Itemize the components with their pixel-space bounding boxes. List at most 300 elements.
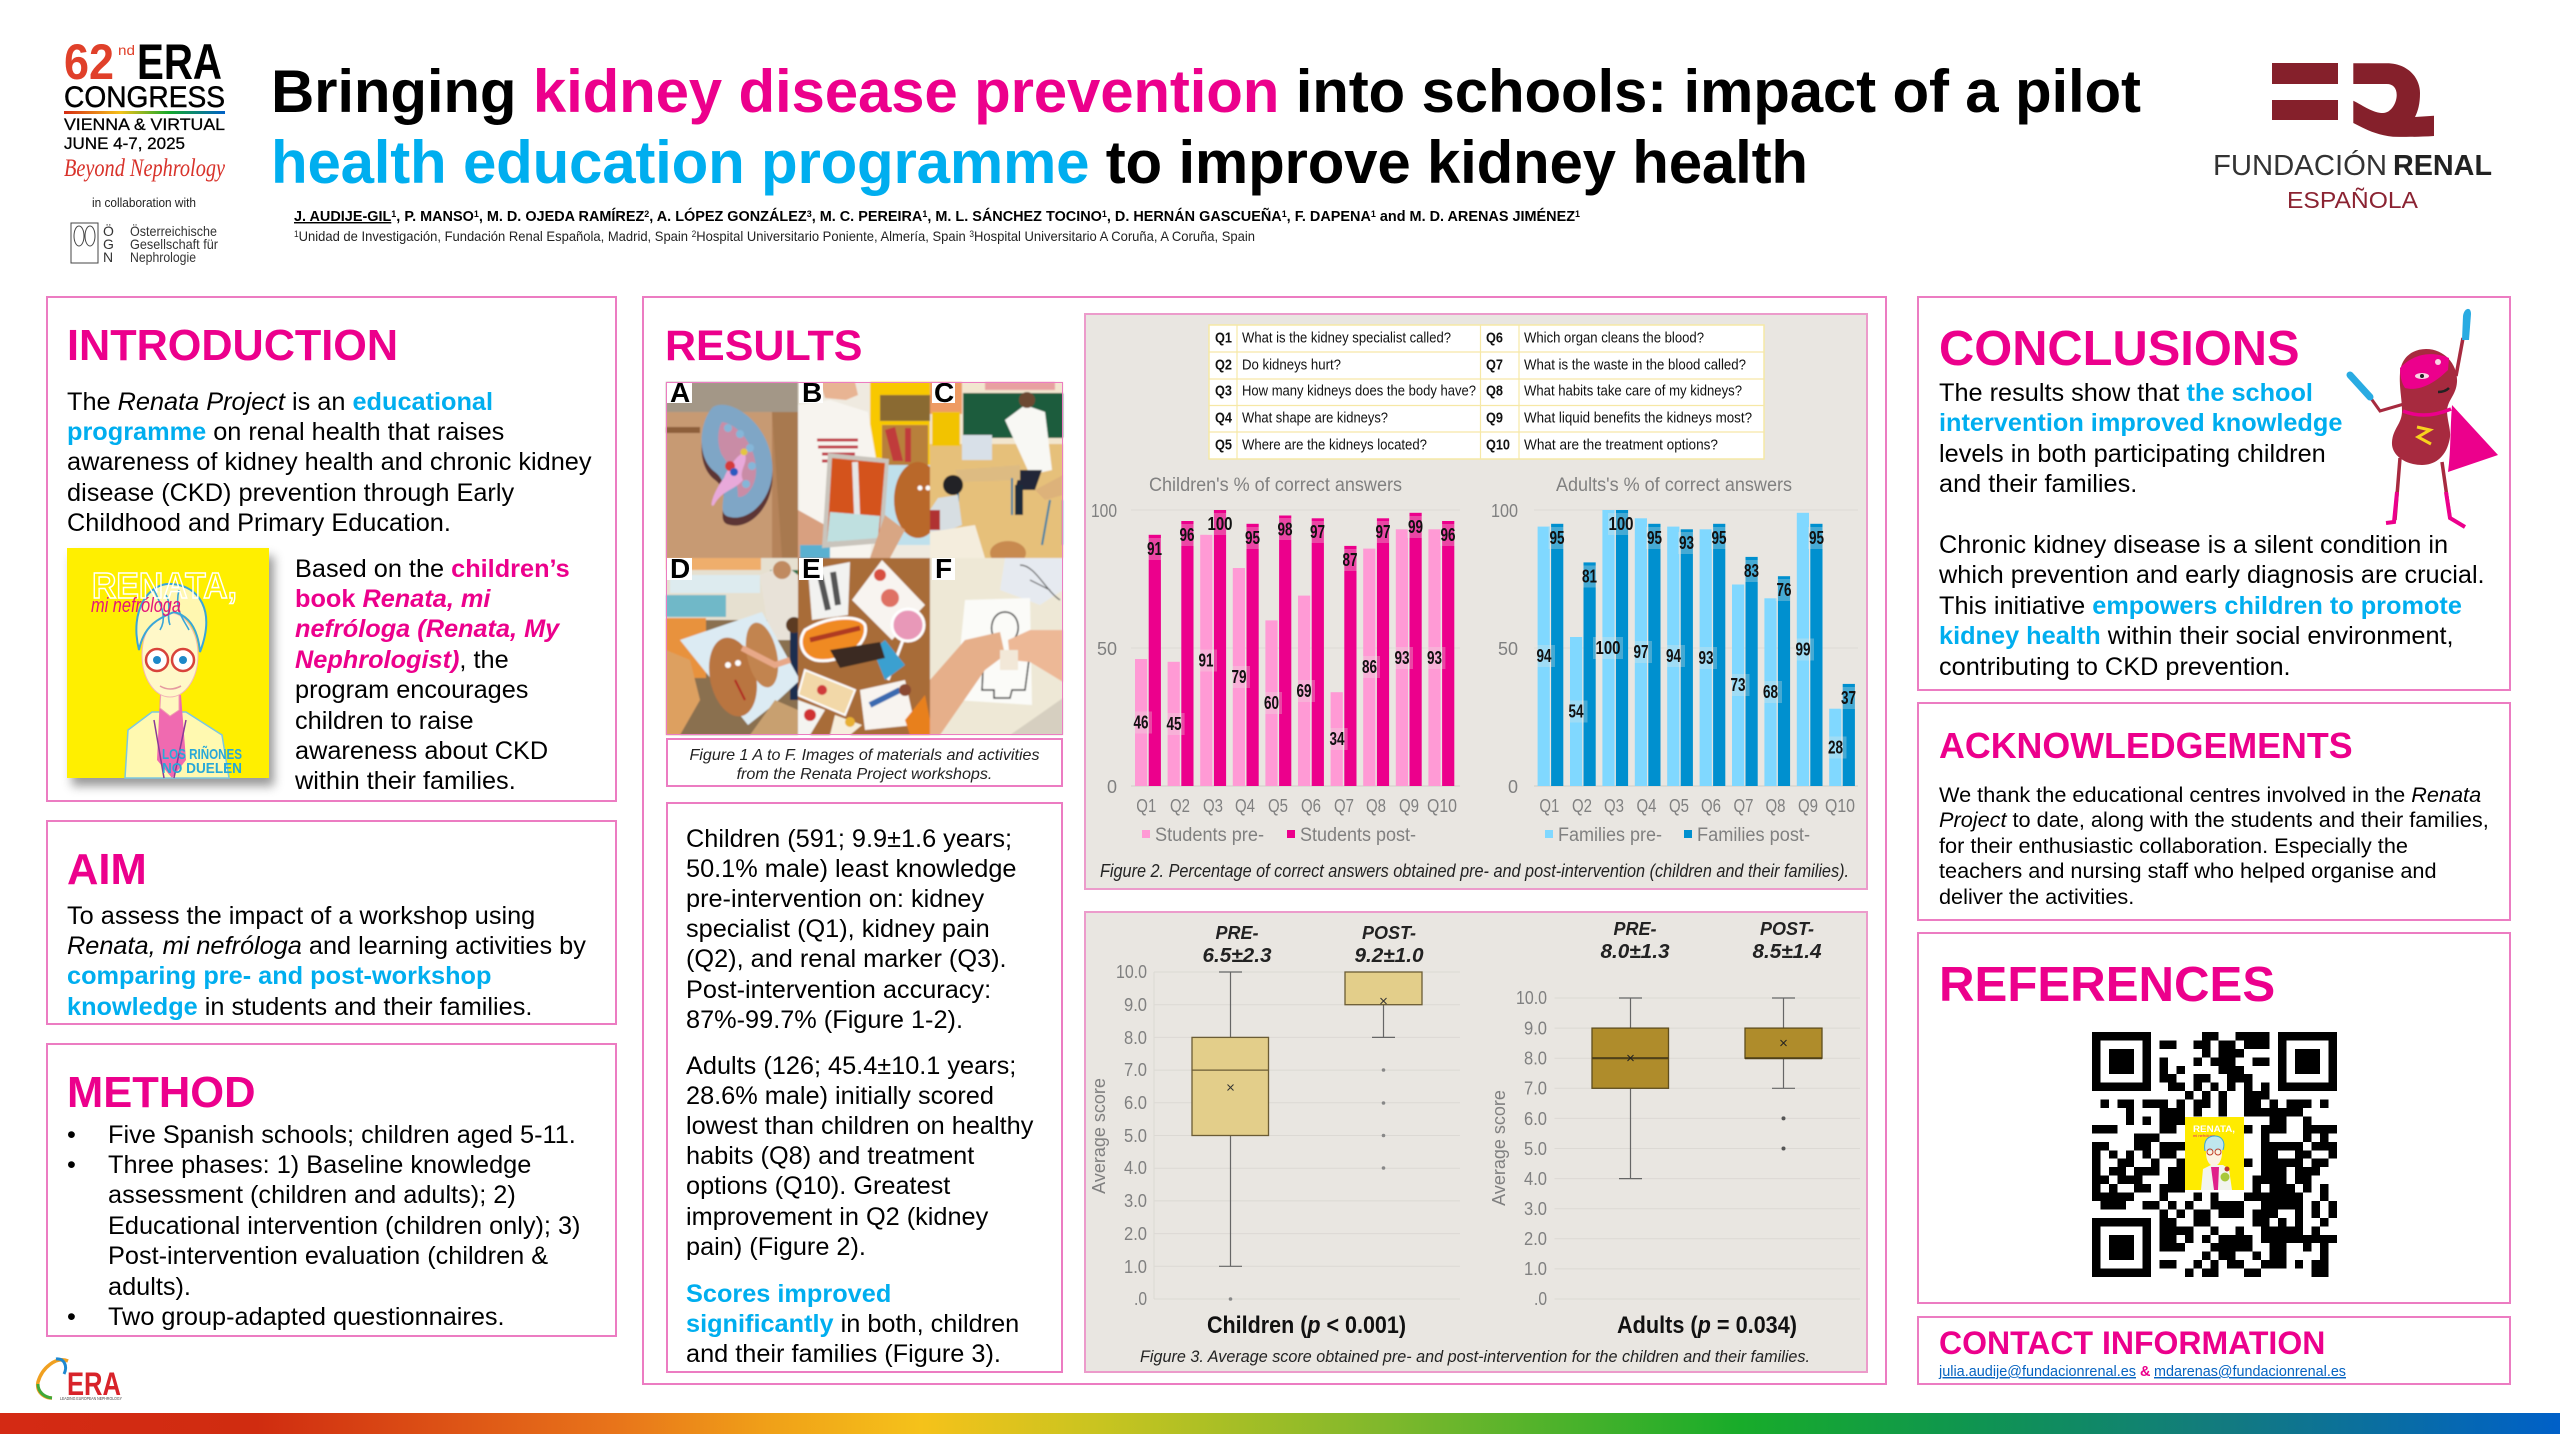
bar chart: children's correct answers: 93 xyxy=(1394,648,1410,668)
bar chart: adults' correct answers: 83 xyxy=(1744,561,1759,581)
logo: Fundación Renal Española: FUNDACIÓN xyxy=(2213,149,2387,182)
text: aim: Renata, mi nefróloga and learning activities by xyxy=(67,932,586,960)
authors and affiliations: 1 xyxy=(1102,209,1107,219)
QR centre: mini book cover: mi nefróloga xyxy=(2193,1133,2216,1138)
photo A: kidney model xyxy=(666,382,798,558)
authors and affiliations: 1 xyxy=(1575,209,1580,219)
text: children results: pre-intervention on: kidney xyxy=(686,885,984,913)
text: acknowledgements xyxy=(1939,782,2489,909)
panel letters A to F: E xyxy=(802,553,821,584)
logo: 62nd ERA Congress: CONGRESS xyxy=(64,81,225,114)
heading: conclusions: CONCLUSIONS xyxy=(1939,322,2300,376)
bar chart: adults' correct answers: Q1 xyxy=(1539,796,1559,816)
text: contact emails: julia.audije@fundacionrenal.es xyxy=(1938,1364,2136,1380)
text: conclusions: and their families. xyxy=(1939,470,2137,498)
photo E: cut-out cards xyxy=(798,558,930,735)
caption: figure 2: Figure 2. Percentage of correct answers obtained pre- and post-intervention (children and their families). xyxy=(1100,861,1849,881)
bar chart: adults' correct answers: 81 xyxy=(1582,566,1597,586)
text: introduction: programme on renal health that raises xyxy=(67,418,504,446)
text: children results: 87%-99.7% (Figure 1-2). xyxy=(686,1006,963,1034)
bar chart: children's correct answers: Q8 xyxy=(1366,796,1386,816)
panel letters A to F: B xyxy=(802,377,822,408)
text: book description: Based on the children’s xyxy=(295,554,570,582)
panel: acknowledgements xyxy=(1917,702,2511,921)
box plot: adults: Average score xyxy=(1489,1090,1509,1206)
bar chart: adults' correct answers: Q2 xyxy=(1572,796,1592,816)
text: book description: children to raise xyxy=(295,707,474,735)
logo: 62nd ERA Congress: Nephrologie xyxy=(130,249,196,265)
authors and affiliations: Unidad de Investigación, Fundación Renal Española, Madrid, Spain xyxy=(299,228,692,244)
heading: results: RESULTS xyxy=(665,322,862,370)
bar chart: children's correct answers: Q4 xyxy=(1235,796,1255,816)
text: aim: To assess the impact of a workshop using xyxy=(67,902,535,930)
text: conclusions: This initiative empowers children to promote xyxy=(1939,592,2462,620)
bar chart: adults' correct answers: Q9 xyxy=(1798,796,1818,816)
logo: ERA: ERA xyxy=(67,1366,121,1402)
bar chart: children's correct answers xyxy=(1091,475,1460,846)
title xyxy=(271,58,2141,196)
authors and affiliations: 1 xyxy=(1282,209,1287,219)
bar chart: children's correct answers: Q1 xyxy=(1136,796,1156,816)
text: acknowledgements: for their enthusiastic collaboration. Especially the xyxy=(1939,833,2408,858)
bar chart: children's correct answers: 93 xyxy=(1427,648,1442,668)
bar chart: adults' correct answers: Families post- xyxy=(1697,825,1810,846)
text: contact emails: & xyxy=(2140,1364,2151,1380)
box plot: children: POST- xyxy=(1362,923,1416,943)
text: acknowledgements: We thank the educational centres involved in the Renata xyxy=(1939,782,2481,806)
panel letters A to F: C xyxy=(934,377,954,408)
bar chart: adults' correct answers: 95 xyxy=(1809,528,1824,548)
bar chart: children's correct answers: 79 xyxy=(1232,667,1246,687)
bar chart: children's correct answers: Q9 xyxy=(1399,796,1419,816)
question table: What are the treatment options? xyxy=(1524,436,1718,454)
panel: references xyxy=(1917,932,2511,1304)
bar chart: adults' correct answers: 28 xyxy=(1828,738,1843,758)
photo C: classroom with teacher xyxy=(930,380,1063,565)
bar chart: children's correct answers: 96 xyxy=(1180,525,1194,545)
box plot: adults: 4.0 xyxy=(1524,1169,1547,1189)
box plot: children: 9.2±1.0 xyxy=(1354,945,1424,967)
bar chart: children's correct answers: 96 xyxy=(1440,525,1456,545)
text: contact emails xyxy=(1938,1364,2346,1380)
box plot: children: 2.0 xyxy=(1124,1224,1147,1244)
box plot: adults xyxy=(1489,919,1860,1339)
bar chart: children's correct answers: 69 xyxy=(1296,681,1312,701)
heading: aim: AIM xyxy=(67,846,147,894)
panel: figure 3 xyxy=(1084,911,1868,1373)
authors and affiliations: 1 xyxy=(1371,209,1376,219)
panel letters A to F: A xyxy=(670,377,690,408)
QR code xyxy=(2092,1032,2337,1277)
box plot: adults: 8.0 xyxy=(1524,1048,1547,1068)
bar chart: adults' correct answers: 0 xyxy=(1508,777,1518,797)
text: contact emails: mdarenas@fundacionrenal.es xyxy=(2154,1364,2346,1380)
text: conclusions: intervention improved knowledge xyxy=(1939,409,2342,437)
logo: 62nd ERA Congress: Beyond Nephrology xyxy=(64,155,226,182)
bar chart: adults' correct answers: 73 xyxy=(1730,675,1746,695)
box plot: children: PRE- xyxy=(1215,923,1259,943)
authors and affiliations: 1 xyxy=(474,209,479,219)
authors and affiliations: J. AUDIJE-GIL xyxy=(294,209,391,225)
bar chart: children's correct answers: Q5 xyxy=(1268,796,1288,816)
caption: figure 1: Figure 1 A to F. Images of materials and activities xyxy=(689,746,1040,764)
question table: What liquid benefits the kidneys most? xyxy=(1524,410,1752,426)
text: conclusions xyxy=(1939,379,2485,681)
text: adults results: pain) (Figure 2). xyxy=(686,1233,866,1261)
box plot: adults: .0 xyxy=(1534,1289,1547,1309)
box plot: adults: 6.0 xyxy=(1524,1109,1547,1129)
bar chart: children's correct answers: Q7 xyxy=(1334,796,1354,816)
bar chart: adults' correct answers: Q5 xyxy=(1669,796,1689,816)
text: significance: and their families (Figure 3). xyxy=(686,1340,1001,1368)
authors and affiliations: , M. D. OJEDA RAMÍREZ xyxy=(479,208,644,225)
bar chart: adults' correct answers: Q10 xyxy=(1825,796,1855,816)
authors and affiliations: and M. D. ARENAS JIMÉNEZ xyxy=(1376,208,1575,225)
authors and affiliations: , M. L. SÁNCHEZ TOCINO xyxy=(927,208,1102,225)
bar chart: adults' correct answers: 100 xyxy=(1491,501,1518,521)
bar chart: children's correct answers: 100 xyxy=(1091,501,1117,521)
heading: acknowledgements: ACKNOWLEDGEMENTS xyxy=(1939,726,2353,766)
logo: 62nd ERA Congress: VIENNA & VIRTUAL xyxy=(64,115,225,134)
text: book description: book Renata, mi xyxy=(295,585,490,613)
text: conclusions: The results show that the school xyxy=(1939,379,2313,407)
box plot: adults: 8.0±1.3 xyxy=(1600,941,1670,963)
box plot: children: 7.0 xyxy=(1124,1060,1147,1080)
authors and affiliations: 3 xyxy=(969,229,974,239)
bar chart: children's correct answers: 50 xyxy=(1097,639,1117,659)
title: health education programme to improve kidney health xyxy=(271,129,1808,196)
text: method list xyxy=(67,1120,580,1331)
text: adults results: lowest than children on healthy xyxy=(686,1112,1033,1140)
text: book description: awareness about CKD xyxy=(295,737,548,765)
authors and affiliations: 2 xyxy=(692,229,696,239)
question table: Q7 xyxy=(1486,356,1503,374)
text: adults results: improvement in Q2 (kidney xyxy=(686,1203,988,1231)
box plot: adults: POST- xyxy=(1760,919,1814,939)
box plot: adults: 1.0 xyxy=(1524,1259,1547,1279)
authors and affiliations: , M. C. PEREIRA xyxy=(812,209,923,225)
photo D: kidney board xyxy=(666,558,802,735)
icon: superhero kidney character xyxy=(2346,308,2498,529)
panel letters A to F xyxy=(667,377,955,584)
rainbow footer bar xyxy=(0,1413,2560,1434)
bar chart: adults' correct answers: 100 xyxy=(1608,514,1634,534)
text: introduction: Childhood and Primary Education. xyxy=(67,509,451,537)
text: conclusions: levels in both participating children xyxy=(1939,440,2326,468)
text: book description xyxy=(295,554,570,795)
bar chart: adults' correct answers: 100 xyxy=(1596,638,1620,658)
box plot: adults: 2.0 xyxy=(1524,1229,1547,1249)
logo: 62nd ERA Congress: 62 xyxy=(64,34,114,90)
bar chart: children's correct answers: 46 xyxy=(1134,712,1148,732)
bar chart: children's correct answers: 97 xyxy=(1310,522,1325,542)
bar chart: children's correct answers: 87 xyxy=(1342,550,1358,570)
authors and affiliations: 1 xyxy=(922,209,927,219)
logo: 62nd ERA Congress: G xyxy=(103,236,114,252)
box plot: children: Children (p < 0.001) xyxy=(1207,1312,1406,1339)
text: book description: nefróloga (Renata, My xyxy=(295,615,559,643)
bar chart: adults' correct answers: 95 xyxy=(1550,528,1564,548)
authors and affiliations: 2 xyxy=(644,209,649,219)
heading: introduction: INTRODUCTION xyxy=(67,322,398,370)
bar chart: adults' correct answers: 76 xyxy=(1776,580,1792,600)
logo: 62nd ERA Congress: in collaboration with xyxy=(92,196,196,210)
text: introduction xyxy=(67,388,592,537)
text: adults results: habits (Q8) and treatment xyxy=(686,1142,974,1170)
question table: How many kidneys does the body have? xyxy=(1242,382,1476,400)
text: aim xyxy=(67,902,586,1021)
box plot: children: 3.0 xyxy=(1124,1191,1147,1211)
panel: aim xyxy=(46,820,617,1025)
bar chart: adults' correct answers: 37 xyxy=(1841,688,1856,708)
figure 1: workshop photographs A to F xyxy=(664,377,1064,736)
box plot: adults: 7.0 xyxy=(1524,1078,1547,1098)
question table: Q6 xyxy=(1486,330,1503,346)
text: method list: • xyxy=(67,1303,76,1331)
text: method list: Educational intervention (children only); 3) xyxy=(108,1212,580,1240)
box plot: adults: 10.0 xyxy=(1516,988,1547,1008)
question table: Q10 xyxy=(1486,436,1510,454)
text: conclusions: kidney health within their social environment, xyxy=(1939,622,2454,650)
question table: What is the waste in the blood called? xyxy=(1524,356,1746,374)
text: introduction: disease (CKD) prevention through Early xyxy=(67,479,514,507)
panel: results text xyxy=(666,802,1063,1373)
logo: 62nd ERA Congress: ERA xyxy=(137,34,222,90)
box plot: adults: 3.0 xyxy=(1524,1199,1547,1219)
text: children results: 50.1% male) least knowledge xyxy=(686,855,1016,883)
box plot: adults: 5.0 xyxy=(1524,1139,1547,1159)
logo: Fundación Renal Española: RENAL xyxy=(2393,150,2492,182)
box plot: adults: 8.5±1.4 xyxy=(1752,941,1822,963)
text: significance: significantly in both, children xyxy=(686,1310,1019,1338)
authors and affiliations: Hospital Universitario Poniente, Almería, Spain xyxy=(696,228,969,244)
text: method list: Two group-adapted questionnaires. xyxy=(108,1303,505,1331)
panel: contact information xyxy=(1917,1316,2511,1385)
logo: ERA: LEADING EUROPEAN NEPHROLOGY xyxy=(60,1396,122,1401)
panel: conclusions xyxy=(1917,296,2511,691)
bar chart: children's correct answers: Q10 xyxy=(1427,796,1457,816)
bar chart: children's correct answers: 97 xyxy=(1376,522,1390,542)
question table: Do kidneys hurt? xyxy=(1242,356,1341,374)
QR centre: mini book cover xyxy=(2185,1117,2244,1190)
text: acknowledgements: Project to date, along with the students and their families, xyxy=(1939,807,2489,832)
bar chart: adults' correct answers: 95 xyxy=(1647,528,1662,548)
caption: figure 1: from the Renata Project workshops. xyxy=(737,765,992,783)
logo: 62nd ERA Congress: nd xyxy=(118,42,135,58)
bar chart: adults' correct answers xyxy=(1491,475,1858,846)
authors and affiliations: , P. MANSO xyxy=(396,209,474,225)
caption: figure 1 xyxy=(666,738,1063,787)
bar chart: children's correct answers: Students pre- xyxy=(1155,825,1264,846)
bar chart: children's correct answers: Children's % of correct answers xyxy=(1149,475,1402,496)
bar chart: adults' correct answers: 94 xyxy=(1666,646,1681,666)
text: acknowledgements: teachers and nursing staff who helped organise and xyxy=(1939,858,2437,883)
bar chart: adults' correct answers: Q8 xyxy=(1766,796,1786,816)
bar chart: adults' correct answers: 94 xyxy=(1536,646,1552,666)
text: acknowledgements: deliver the activities. xyxy=(1939,884,2134,909)
box plot: adults: Adults (p = 0.034) xyxy=(1617,1312,1797,1339)
caption: figure 3: Figure 3. Average score obtained pre- and post-intervention for the children and their families. xyxy=(1140,1347,1810,1366)
box plot: children: 9.0 xyxy=(1124,995,1147,1015)
box plot: children: 4.0 xyxy=(1124,1158,1147,1178)
book cover: Renata, mi nefróloga: RENATA, xyxy=(92,565,237,606)
bar chart: children's correct answers: 99 xyxy=(1408,517,1423,537)
question table: Q1 xyxy=(1215,330,1232,346)
authors and affiliations: , F. DAPENA xyxy=(1287,209,1371,225)
text: method list: Five Spanish schools; children aged 5-11. xyxy=(108,1120,576,1148)
authors and affiliations: 1 xyxy=(391,209,396,219)
text: significance xyxy=(686,1280,1019,1368)
box plot: children: 6.5±2.3 xyxy=(1202,945,1272,967)
panel letters A to F: F xyxy=(935,553,952,584)
text: children results: specialist (Q1), kidney pain xyxy=(686,915,990,943)
book cover: Renata, mi nefróloga: NO DUELEN xyxy=(162,760,242,777)
text: aim: knowledge in students and their families. xyxy=(67,993,532,1021)
box plot: children: 8.0 xyxy=(1124,1028,1147,1048)
photo F: hands on body worksheet xyxy=(930,558,1063,735)
text: children results: Children (591; 9.9±1.6 years; xyxy=(686,824,1012,852)
bar chart: children's correct answers: 34 xyxy=(1330,729,1344,749)
text: book description: within their families. xyxy=(295,767,516,795)
text: adults results: Adults (126; 45.4±10.1 years; xyxy=(686,1052,1016,1080)
bar chart: adults' correct answers: 68 xyxy=(1763,682,1778,702)
text: children results xyxy=(686,824,1016,1034)
text: introduction: The Renata Project is an educational xyxy=(67,388,493,416)
bar chart: children's correct answers: Students post- xyxy=(1300,825,1416,846)
box plot: children: .0 xyxy=(1134,1289,1147,1309)
question table: Q4 xyxy=(1215,410,1233,426)
bar chart: adults' correct answers: Families pre- xyxy=(1558,825,1662,846)
text: introduction: awareness of kidney health and chronic kidney xyxy=(67,448,592,476)
question table xyxy=(1209,325,1764,459)
bar chart: adults' correct answers: Q7 xyxy=(1734,796,1754,816)
bar chart: children's correct answers: 98 xyxy=(1278,520,1292,540)
text: method list: • xyxy=(67,1151,76,1179)
bar chart: adults' correct answers: 99 xyxy=(1796,640,1810,660)
authors and affiliations xyxy=(294,207,1580,244)
logo: 62nd ERA Congress: Österreichische xyxy=(130,222,217,239)
authors and affiliations: , A. LÓPEZ GONZÁLEZ xyxy=(649,207,807,225)
heading: method: METHOD xyxy=(67,1068,256,1116)
bar chart: adults' correct answers: 54 xyxy=(1568,702,1584,722)
question table: What habits take care of my kidneys? xyxy=(1524,382,1742,400)
logo: 62nd ERA Congress: N xyxy=(103,249,113,265)
question table: Q3 xyxy=(1215,382,1232,400)
bar chart: children's correct answers: 86 xyxy=(1362,657,1377,677)
question table: Q8 xyxy=(1486,382,1503,400)
QR centre: mini book cover: RENATA, xyxy=(2193,1124,2235,1134)
panel: figure 2 xyxy=(1084,313,1868,890)
text: adults results: options (Q10). Greatest xyxy=(686,1172,950,1200)
book cover: Renata, mi nefróloga: mi nefróloga xyxy=(91,595,181,617)
text: conclusions: Chronic kidney disease is a silent condition in xyxy=(1939,531,2448,559)
book cover: Renata, mi nefróloga xyxy=(66,548,280,792)
logo: ERA xyxy=(36,1357,122,1402)
text: book description: Nephrologist), the xyxy=(295,646,509,674)
box plot: children: 6.0 xyxy=(1124,1093,1147,1113)
text: method list: assessment (children and adults); 2) xyxy=(108,1181,516,1209)
text: adults results xyxy=(686,1052,1034,1261)
authors and affiliations: , D. HERNÁN GASCUEÑA xyxy=(1107,207,1282,225)
question table: What is the kidney specialist called? xyxy=(1242,330,1451,346)
bar chart: children's correct answers: 0 xyxy=(1107,777,1117,797)
title: Bringing kidney disease prevention into schools: impact of a pilot xyxy=(271,58,2141,125)
bar chart: children's correct answers: Q3 xyxy=(1203,796,1223,816)
panel: results xyxy=(642,296,1887,1385)
bar chart: children's correct answers: 91 xyxy=(1147,539,1162,559)
bar chart: adults' correct answers: 93 xyxy=(1698,648,1714,668)
question table: Q5 xyxy=(1215,436,1232,454)
logo: 62nd ERA Congress xyxy=(64,34,226,265)
panel letters A to F: D xyxy=(670,553,690,584)
bar chart: children's correct answers: 95 xyxy=(1245,528,1260,548)
question table: Q2 xyxy=(1215,356,1232,374)
text: method list: Post-intervention evaluation (children & xyxy=(108,1242,548,1270)
text: children results: (Q2), and renal marker (Q3). xyxy=(686,945,1007,973)
question table: Q9 xyxy=(1486,410,1503,426)
panel: method xyxy=(46,1043,617,1337)
logo: 62nd ERA Congress: Gesellschaft für xyxy=(130,236,218,252)
bar chart: adults' correct answers: Adults's % of correct answers xyxy=(1556,475,1792,496)
box plot: children xyxy=(1089,923,1460,1339)
logo: 62nd ERA Congress: JUNE 4-7, 2025 xyxy=(64,134,185,153)
text: method list: adults). xyxy=(108,1273,191,1301)
box plot: children: 1.0 xyxy=(1124,1257,1147,1277)
box plot: children: 10.0 xyxy=(1116,962,1147,982)
bar chart: adults' correct answers: 93 xyxy=(1679,533,1694,553)
text: conclusions: which prevention and early diagnosis are crucial. xyxy=(1939,561,2485,589)
bar chart: children's correct answers: Q6 xyxy=(1301,796,1321,816)
book cover: Renata, mi nefróloga: LOS RIÑONES xyxy=(162,745,242,763)
bar chart: adults' correct answers: Q4 xyxy=(1636,796,1656,816)
text: adults results: 28.6% male) initially scored xyxy=(686,1082,994,1110)
logo: Fundación Renal Española xyxy=(2213,63,2492,213)
bar chart: children's correct answers: 60 xyxy=(1264,693,1279,713)
bar chart: children's correct answers: 45 xyxy=(1166,714,1182,734)
bar chart: adults' correct answers: Q6 xyxy=(1701,796,1721,816)
text: method list: • xyxy=(67,1120,76,1148)
authors and affiliations: Hospital Universitario A Coruña, A Coruña, Spain xyxy=(974,228,1255,244)
text: conclusions: contributing to CKD prevention. xyxy=(1939,653,2291,681)
question table: What shape are kidneys? xyxy=(1242,410,1388,426)
authors and affiliations: 3 xyxy=(807,209,812,219)
bar chart: children's correct answers: 100 xyxy=(1208,514,1232,534)
panel: introduction xyxy=(46,296,617,802)
box plot: adults: 9.0 xyxy=(1524,1018,1547,1038)
bar chart: adults' correct answers: 97 xyxy=(1634,642,1648,662)
box plot: children: Average score xyxy=(1089,1078,1109,1194)
authors and affiliations: 1 xyxy=(294,229,299,239)
heading: references: REFERENCES xyxy=(1939,956,2275,1012)
text: book description: program encourages xyxy=(295,676,528,704)
logo: 62nd ERA Congress: Ö xyxy=(103,222,114,239)
heading: contact information: CONTACT INFORMATION xyxy=(1939,1325,2325,1361)
text: children results: Post-intervention accuracy: xyxy=(686,976,991,1004)
bar chart: adults' correct answers: 95 xyxy=(1712,528,1726,548)
box plot: children: 5.0 xyxy=(1124,1126,1147,1146)
photo B: tablet with kidneys xyxy=(798,382,942,558)
bar chart: adults' correct answers: 50 xyxy=(1498,639,1518,659)
text: aim: comparing pre- and post-workshop xyxy=(67,962,491,990)
question table: Where are the kidneys located? xyxy=(1242,436,1427,454)
box plot: adults: PRE- xyxy=(1613,919,1657,939)
logo: Fundación Renal Española: ESPAÑOLA xyxy=(2287,187,2419,213)
bar chart: children's correct answers: 91 xyxy=(1198,650,1214,670)
bar chart: adults' correct answers: Q3 xyxy=(1604,796,1624,816)
text: significance: Scores improved xyxy=(686,1280,891,1308)
question table: Which organ cleans the blood? xyxy=(1524,330,1704,346)
text: method list: Three phases: 1) Baseline knowledge xyxy=(108,1151,531,1179)
